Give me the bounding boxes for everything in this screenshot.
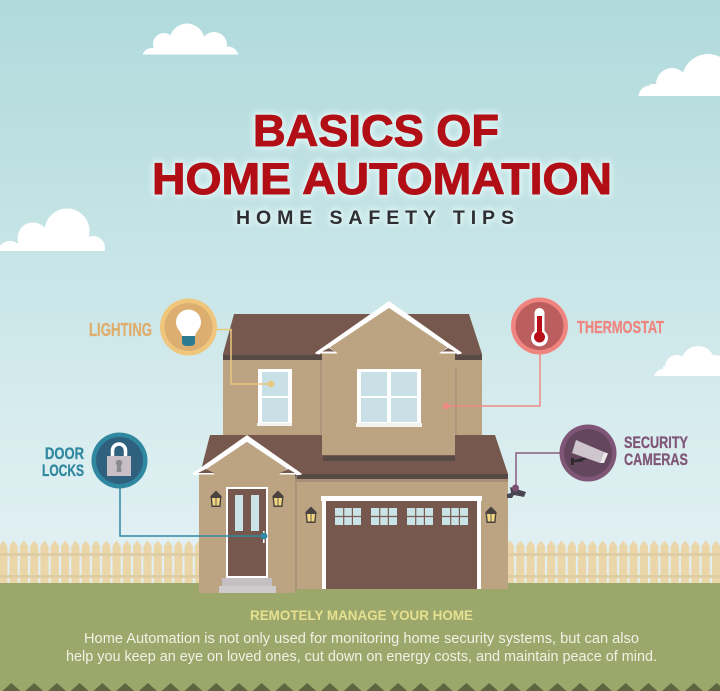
security label (624, 433, 688, 469)
camera connector (516, 453, 560, 488)
lower wall (295, 479, 508, 589)
security label: SECURITY (624, 433, 688, 452)
door label: DOOR (45, 444, 84, 463)
garage (321, 496, 482, 589)
thermostat connector (446, 354, 540, 406)
door locks callout (42, 432, 267, 539)
centre gable trim (316, 302, 461, 354)
centre gable wall (322, 307, 455, 455)
title (152, 107, 612, 229)
door label: LOCKS (42, 461, 84, 480)
lighting callout (89, 298, 274, 387)
footer heading: REMOTELY MANAGE YOUR HOME (250, 608, 473, 623)
security badge (560, 424, 616, 482)
cloud right (654, 346, 720, 376)
lighting connector (216, 330, 271, 384)
icon: wall camera (507, 487, 526, 498)
footer paragraph: Home Automation is not only used for monitoring home security systems, but can also (84, 631, 639, 647)
door label (42, 444, 84, 480)
wall shadows (321, 360, 456, 434)
icon: security camera (571, 440, 608, 465)
right upper window (356, 369, 422, 427)
cloud top left (142, 24, 238, 54)
cloud left (0, 208, 105, 251)
zigzag border (0, 683, 720, 691)
picket fence right (508, 540, 720, 584)
icon: padlock (107, 444, 131, 476)
footer paragraph: help you keep an eye on loved ones, cut down on energy costs, and maintain peace of mind. (66, 649, 657, 665)
porch wall (199, 442, 295, 593)
security cameras callout (507, 424, 688, 498)
mid eave (323, 456, 455, 461)
thermostat badge (511, 298, 568, 354)
grass panel (0, 583, 720, 691)
upper eaves (223, 355, 482, 360)
lower eave (295, 474, 508, 479)
footer paragraph (66, 631, 657, 665)
gable vents (318, 347, 459, 354)
security label: CAMERAS (624, 450, 688, 469)
lower roof (200, 435, 508, 480)
subtitle: HOME SAFETY TIPS (236, 207, 514, 229)
icon: thermometer (531, 308, 548, 346)
lighting label: LIGHTING (89, 320, 152, 340)
upper wall (223, 358, 482, 438)
footer text (66, 608, 657, 665)
left upper window (257, 369, 292, 426)
lighting badge (160, 298, 217, 356)
thermostat label: THERMOSTAT (577, 317, 664, 337)
porch gable trim (193, 436, 301, 474)
house (193, 302, 508, 593)
steps (219, 578, 276, 593)
title line one: BASICS OF (253, 107, 499, 156)
door badge (92, 432, 148, 488)
icon: light bulb (176, 310, 201, 346)
door connector (120, 488, 264, 536)
upper roof (223, 314, 482, 360)
picket fence left (0, 540, 199, 584)
wall lamps (210, 490, 497, 523)
thermostat callout (443, 298, 664, 409)
front door (226, 487, 268, 578)
cloud top right (638, 54, 720, 96)
title line two: HOME AUTOMATION (152, 155, 612, 204)
